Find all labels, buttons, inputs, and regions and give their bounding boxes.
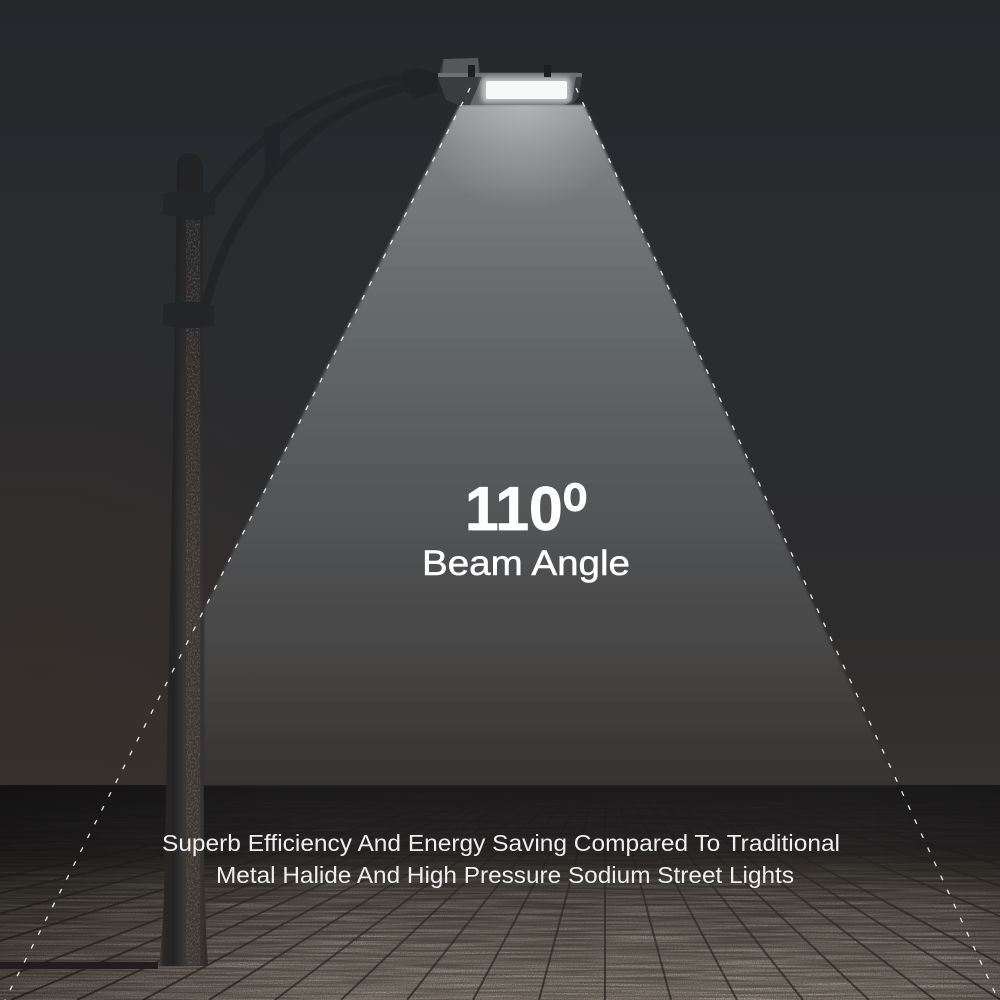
lamp fixture (438, 58, 582, 105)
description line two: Metal Halide And High Pressure Sodium Street Lights (216, 862, 794, 888)
street light pole (0, 153, 215, 969)
mounting clips (468, 65, 475, 77)
night sky background (0, 0, 1000, 786)
arm connector (403, 68, 438, 98)
lit LED panel (481, 77, 571, 103)
lamp arm (207, 68, 438, 300)
description text (162, 830, 840, 888)
pavement ground (0, 785, 1000, 1000)
pole texture (186, 220, 200, 965)
pole shaft (159, 153, 208, 966)
beam angle value: 110⁰ (465, 475, 587, 544)
beam angle heading (422, 475, 630, 583)
description line one: Superb Efficiency And Energy Saving Compared To Traditional (162, 830, 840, 856)
upper clamp (163, 191, 215, 217)
lower clamp (163, 302, 214, 328)
ground shadow (0, 962, 158, 969)
beam angle label: Beam Angle (422, 544, 630, 583)
arm brace (264, 122, 280, 178)
light beam (204, 105, 896, 785)
